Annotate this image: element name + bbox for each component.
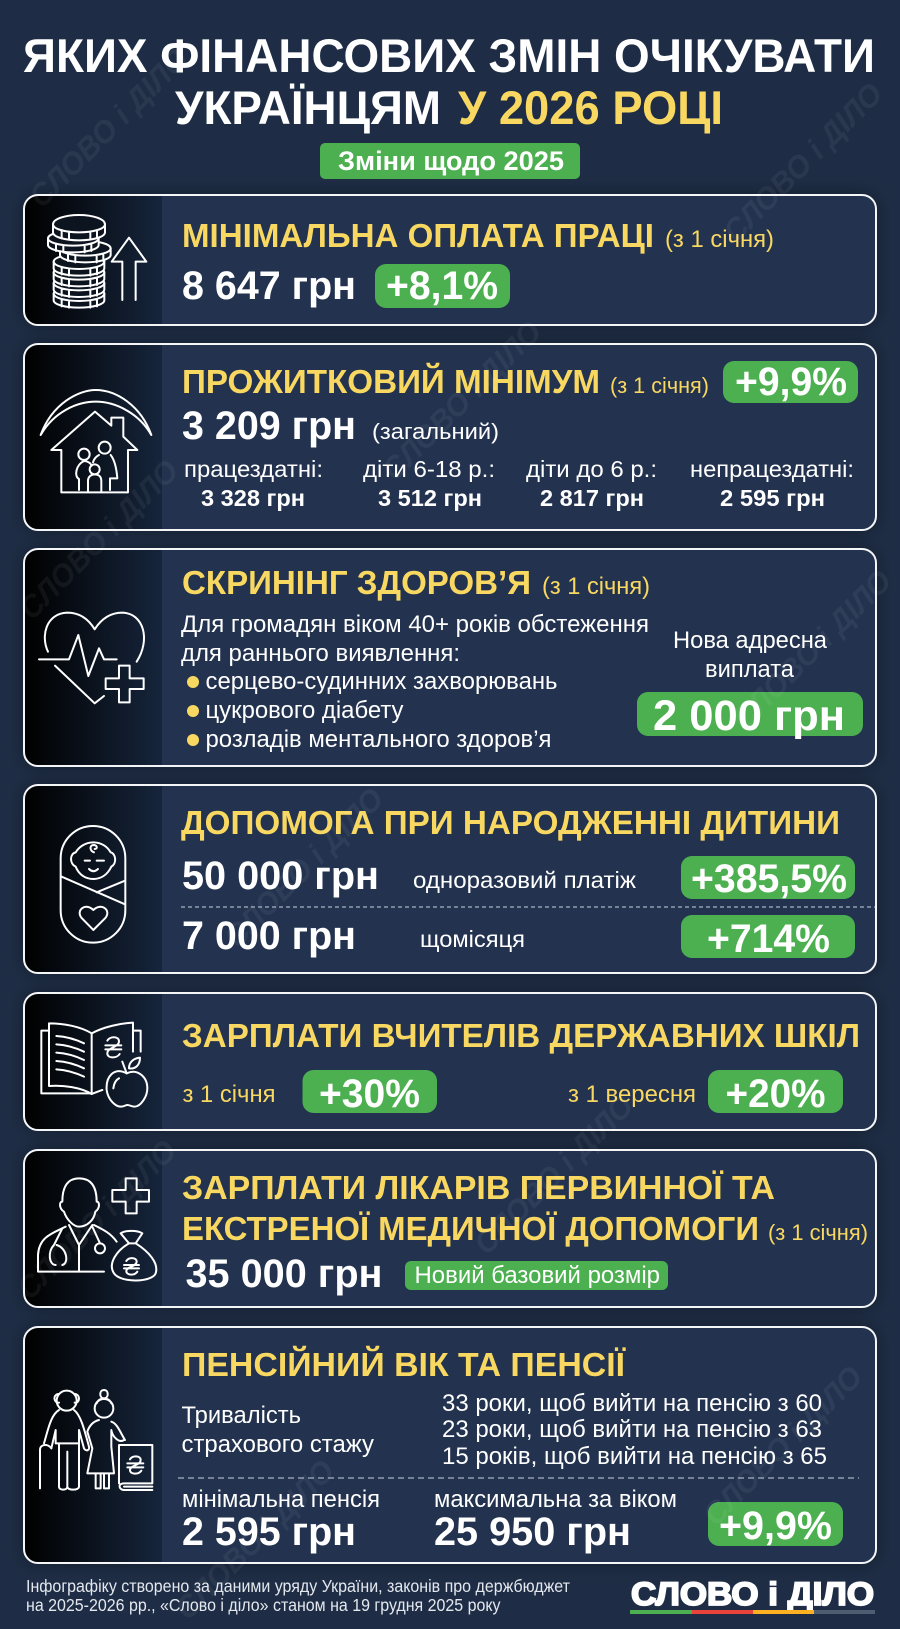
list: required years: 23 роки, щоб вийти на пенсію з 63 xyxy=(442,1416,822,1443)
stat: maximum pension: максимальна за віком xyxy=(434,1486,677,1513)
row: monthly payment: щомісяця xyxy=(420,926,525,952)
label: insurance period xyxy=(182,1402,374,1458)
date note: (з 1 січня) xyxy=(542,573,650,600)
category: children 6-18: 3 512 грн xyxy=(378,485,482,511)
category: able-bodied: 3 328 грн xyxy=(201,485,305,511)
watermarks: СЛОВО і ДІЛО xyxy=(375,314,548,487)
category: disabled: 2 595 грн xyxy=(720,485,825,511)
badge: new base amount: Новий базовий розмір xyxy=(414,1262,660,1289)
value: 35 000 грн xyxy=(186,1252,382,1296)
icon: coins with arrow xyxy=(48,215,146,308)
description: для раннього виявлення: xyxy=(181,640,460,667)
label: insurance period: Тривалість xyxy=(182,1402,301,1429)
title: УКРАЇНЦЯМ xyxy=(175,81,441,134)
row: monthly payment xyxy=(182,914,855,961)
category: disabled xyxy=(690,456,854,511)
from January xyxy=(182,1070,437,1116)
caption: new payment: Нова адресна xyxy=(673,627,828,654)
list: screened conditions: розладів ментального здоров’я xyxy=(206,726,552,753)
panel: health screening xyxy=(24,549,876,766)
panel: subsistence minimum xyxy=(24,344,876,530)
from September xyxy=(568,1070,843,1116)
category: able-bodied xyxy=(184,456,323,511)
icon: heart with pulse xyxy=(39,613,144,703)
from September: +20% xyxy=(726,1072,826,1116)
from January: +30% xyxy=(319,1072,420,1116)
stat: minimum pension: 2 595 грн xyxy=(182,1510,356,1554)
watermarks: СЛОВО і ДІЛО xyxy=(725,563,898,736)
heading: subsistence minimum: ПРОЖИТКОВИЙ МІНІМУМ xyxy=(182,362,600,400)
icon: swaddled baby xyxy=(61,826,125,943)
heading: pensions: ПЕНСІЙНИЙ ВІК ТА ПЕНСІЇ xyxy=(182,1345,626,1383)
title: У 2026 РОЦІ xyxy=(458,81,723,134)
badge: changes vs 2025: Зміни щодо 2025 xyxy=(338,146,564,176)
title: ЯКИХ ФІНАНСОВИХ ЗМІН ОЧІКУВАТИ xyxy=(23,29,875,82)
watermarks: СЛОВО і ДІЛО xyxy=(217,781,390,954)
icon: book and apple xyxy=(41,1023,147,1107)
from September: з 1 вересня xyxy=(568,1081,696,1108)
category: children 6-18: діти 6-18 р.: xyxy=(363,456,495,482)
stat: maximum pension: 25 950 грн xyxy=(434,1510,631,1554)
list: screened conditions xyxy=(187,668,558,753)
label: insurance period: страхового стажу xyxy=(182,1431,374,1458)
category: able-bodied: працездатні: xyxy=(184,456,323,482)
list: required years: 33 роки, щоб вийти на пенсію з 60 xyxy=(442,1390,822,1417)
stat: minimum pension: мінімальна пенсія xyxy=(182,1486,380,1513)
row: one-time payment xyxy=(182,854,855,901)
footer source note: на 2025-2026 рр., «Слово і діло» станом на 19 грудня 2025 року xyxy=(26,1595,501,1615)
panel: doctor salaries xyxy=(24,1150,876,1307)
category: disabled: непрацездатні: xyxy=(690,456,854,482)
heading: doctor salaries xyxy=(182,1169,775,1247)
heading: minimum wage: МІНІМАЛЬНА ОПЛАТА ПРАЦІ xyxy=(182,217,654,254)
heading: teacher salaries: ЗАРПЛАТИ ВЧИТЕЛІВ ДЕРЖАВНИХ ШКІЛ xyxy=(182,1017,860,1054)
logo: СЛОВО і ДІЛО xyxy=(631,1576,874,1612)
category: children under 6: 2 817 грн xyxy=(540,485,644,511)
row: monthly payment: +714% xyxy=(707,917,830,961)
list: screened conditions: серцево-судинних захворювань xyxy=(206,668,558,695)
panel: retirement and pensions xyxy=(24,1327,876,1563)
description: Для громадян віком 40+ років обстеження xyxy=(181,611,649,638)
badge: +9,9%: +9,9% xyxy=(735,360,847,404)
description xyxy=(181,611,649,667)
list: required years: 15 років, щоб вийти на пенсію з 65 xyxy=(442,1443,827,1470)
heading: doctor salaries: ЗАРПЛАТИ ЛІКАРІВ ПЕРВИННОЇ ТА xyxy=(182,1169,775,1206)
stat: minimum pension xyxy=(182,1486,380,1554)
watermarks: СЛОВО і ДІЛО xyxy=(716,76,889,249)
heading: childbirth aid: ДОПОМОГА ПРИ НАРОДЖЕННІ ДИТИНИ xyxy=(181,804,840,841)
list: required years xyxy=(442,1390,827,1470)
badge: 2 000 грн: 2 000 грн xyxy=(653,692,845,740)
row: one-time payment: 50 000 грн xyxy=(182,854,379,898)
watermarks: СЛОВО і ДІЛО xyxy=(12,453,185,626)
panel: teacher salaries xyxy=(24,993,876,1130)
category: children under 6 xyxy=(526,456,657,511)
caption: new payment xyxy=(673,627,828,683)
heading: doctor salaries: ЕКСТРЕНОЇ МЕДИЧНОЇ ДОПОМОГИ xyxy=(182,1210,759,1247)
note: general: (загальний) xyxy=(372,419,499,444)
row: one-time payment: +385,5% xyxy=(691,857,847,901)
icon: elderly couple with book xyxy=(40,1390,152,1490)
from January: з 1 січня xyxy=(182,1081,276,1108)
date note: (з 1 січня) xyxy=(610,373,709,398)
heading: health screening: СКРИНІНГ ЗДОРОВ’Я xyxy=(182,564,531,601)
value: 8 647 грн xyxy=(182,264,356,308)
value: 3 209 грн xyxy=(182,404,356,448)
date note: (з 1 січня) xyxy=(665,226,774,253)
list: screened conditions: цукрового діабету xyxy=(206,697,404,724)
watermarks: СЛОВО і ДІЛО xyxy=(696,1359,869,1532)
watermarks: СЛОВО і ДІЛО xyxy=(168,1453,341,1626)
footer source note xyxy=(26,1576,570,1615)
title xyxy=(23,29,875,134)
watermarks: СЛОВО і ДІЛО xyxy=(467,1088,640,1261)
caption: new payment: виплата xyxy=(705,656,795,683)
panel: minimum wage xyxy=(24,195,876,325)
row: one-time payment: одноразовий платіж xyxy=(413,867,636,893)
watermarks: СЛОВО і ДІЛО xyxy=(10,1133,183,1306)
footer source note: Інфографіку створено за даними уряду України, законів про держбюджет xyxy=(26,1576,570,1596)
category: children 6-18 xyxy=(363,456,495,511)
badge: +8,1%: +8,1% xyxy=(386,264,498,308)
stat: maximum pension xyxy=(434,1486,677,1554)
icon: doctor with money bag xyxy=(38,1178,156,1280)
date note: (з 1 січня) xyxy=(768,1220,868,1245)
category: children under 6: діти до 6 р.: xyxy=(526,456,657,482)
badge: +9,9%: +9,9% xyxy=(719,1504,832,1548)
icon: house with family xyxy=(41,390,151,492)
row: monthly payment: 7 000 грн xyxy=(182,914,356,958)
panel: childbirth aid xyxy=(24,785,876,973)
watermarks: СЛОВО і ДІЛО xyxy=(22,41,195,214)
